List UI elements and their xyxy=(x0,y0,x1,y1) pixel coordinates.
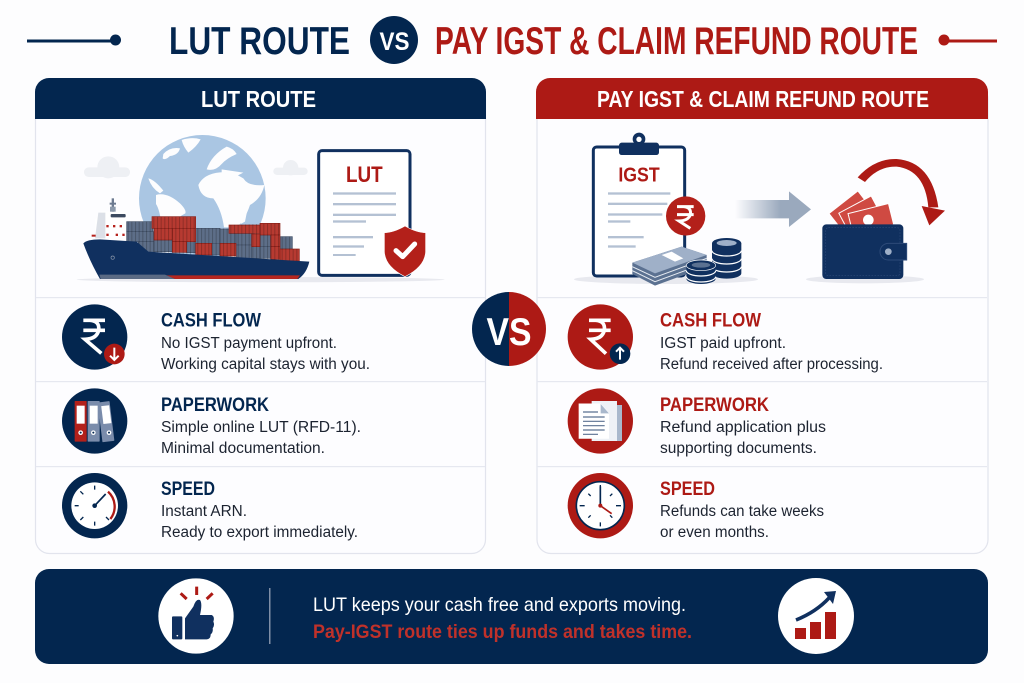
cash stacks xyxy=(632,238,741,286)
text: takeaway xyxy=(313,594,692,643)
text: speed: or even months. xyxy=(660,524,769,541)
arrow xyxy=(735,191,811,227)
text: paperwork xyxy=(161,394,361,457)
banner: takeaway xyxy=(35,569,988,664)
icon: clock xyxy=(568,473,633,538)
icon: growth chart xyxy=(778,578,854,654)
panel header: LUT route xyxy=(35,78,486,119)
text: speed xyxy=(660,478,824,541)
text: cash flow: CASH FLOW xyxy=(660,310,761,332)
text: paperwork: Minimal documentation. xyxy=(161,440,325,457)
text: takeaway: Pay-IGST route ties up funds and takes time. xyxy=(313,621,692,643)
curved red arrow xyxy=(858,159,945,225)
icon: binders xyxy=(62,388,127,454)
panel header: refund route: PAY IGST & CLAIM REFUND ROUTE xyxy=(597,86,929,112)
icon: thumbs up xyxy=(158,578,234,654)
text: speed: SPEED xyxy=(161,478,215,500)
badge: VS small xyxy=(370,16,418,64)
row: speed xyxy=(537,466,987,541)
wallet xyxy=(822,191,907,279)
title xyxy=(27,16,997,64)
text: speed: SPEED xyxy=(660,478,715,500)
badge: VS center xyxy=(472,292,546,366)
containers xyxy=(127,217,300,262)
icon: documents xyxy=(568,388,633,454)
text: cash flow xyxy=(660,310,883,373)
text: takeaway: LUT keeps your cash free and exports moving. xyxy=(313,594,686,616)
badge: VS small: VS xyxy=(380,28,410,56)
illustration: ship, globe and LUT document: LUT xyxy=(346,162,383,187)
text: cash flow: Working capital stays with you. xyxy=(161,356,370,373)
icon: rupee up xyxy=(568,304,633,370)
divider xyxy=(269,588,270,644)
text: paperwork xyxy=(660,394,826,457)
decorative line: left xyxy=(27,34,121,46)
text: paperwork: Simple online LUT (RFD-11). xyxy=(161,419,361,436)
icon: speedometer xyxy=(62,473,127,538)
row: speed xyxy=(36,466,485,541)
illustration: clipboard, cash and wallet xyxy=(574,133,945,286)
panel header: LUT route: LUT ROUTE xyxy=(201,86,316,112)
text: cash flow: Refund received after processing. xyxy=(660,356,883,373)
illustration: ship, globe and LUT document xyxy=(77,135,445,282)
ship superstructure xyxy=(92,198,127,240)
row: paperwork xyxy=(36,381,485,457)
text: paperwork: PAPERWORK xyxy=(660,394,769,416)
panel header: refund route xyxy=(536,78,988,119)
decorative line: right xyxy=(938,34,997,46)
text: cash flow xyxy=(161,310,370,373)
badge: VS center: VS xyxy=(486,311,532,354)
text: paperwork: PAPERWORK xyxy=(161,394,269,416)
text: cash flow: No IGST payment upfront. xyxy=(161,335,337,352)
row: paperwork xyxy=(537,381,987,457)
hull xyxy=(83,239,309,279)
text: paperwork: supporting documents. xyxy=(660,440,817,457)
panel: LUT route xyxy=(35,78,486,554)
text: paperwork: Refund application plus xyxy=(660,419,826,436)
text: speed: Ready to export immediately. xyxy=(161,524,358,541)
row: cash flow xyxy=(537,297,987,373)
row: cash flow xyxy=(36,297,485,373)
icon: rupee down xyxy=(62,304,127,370)
text: cash flow: CASH FLOW xyxy=(161,310,261,332)
title: LUT route: LUT ROUTE xyxy=(169,20,350,63)
text: cash flow: IGST paid upfront. xyxy=(660,335,786,352)
text: speed: Instant ARN. xyxy=(161,503,247,520)
illustration: clipboard, cash and wallet: IGST xyxy=(618,165,660,187)
text: speed xyxy=(161,478,358,541)
panel: refund route xyxy=(536,78,988,554)
text: speed: Refunds can take weeks xyxy=(660,503,824,520)
